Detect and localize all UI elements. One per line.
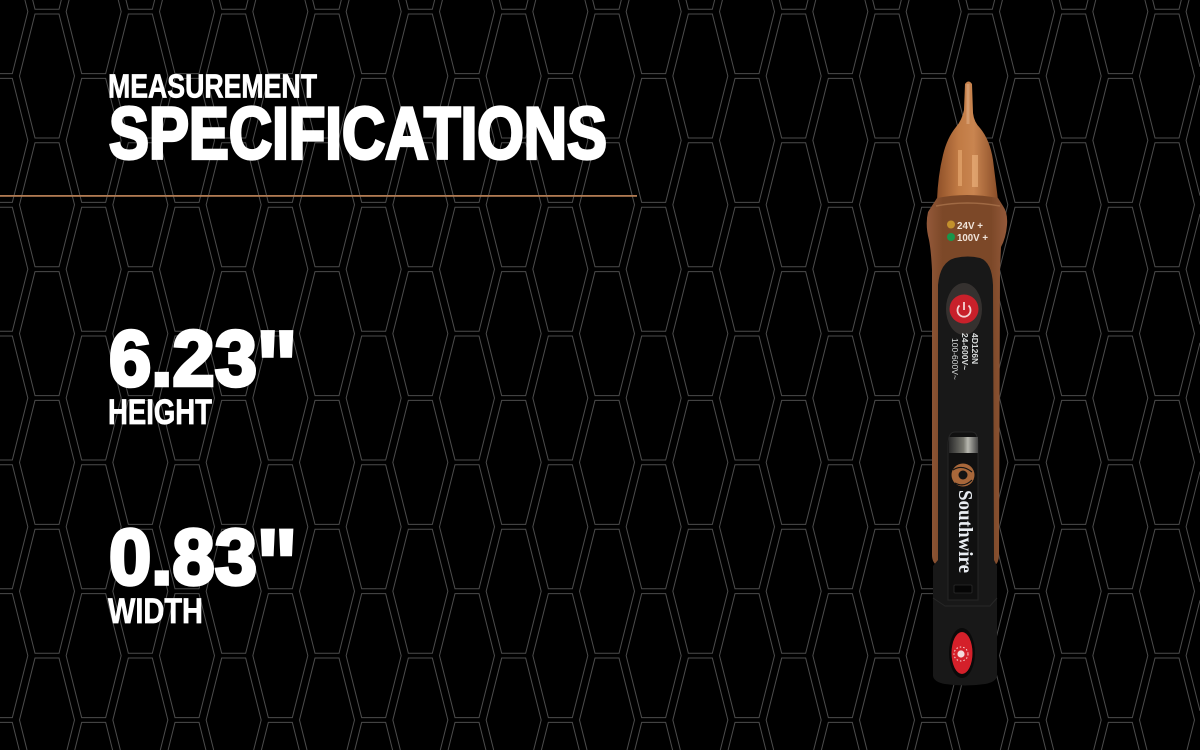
collar highlight bbox=[936, 203, 1000, 206]
black body bbox=[933, 256, 997, 686]
heading: measurement specifications bbox=[108, 68, 607, 174]
flashlight button bbox=[949, 628, 975, 678]
stat: height bbox=[108, 310, 298, 432]
model text bbox=[950, 333, 980, 380]
LED indicator labels: 100V + bbox=[957, 232, 988, 244]
stat: width: " bbox=[256, 508, 298, 620]
stat: height: HEIGHT bbox=[108, 393, 212, 432]
model text: 4D126N bbox=[970, 333, 980, 364]
power button recess bbox=[946, 283, 982, 335]
heading: measurement specifications: MEASUREMENT bbox=[108, 68, 317, 104]
product: voltage tester pen bbox=[927, 82, 1007, 686]
stat: height: 6.23 bbox=[109, 314, 257, 402]
stat: height: " bbox=[256, 310, 298, 422]
LED indicator labels bbox=[947, 220, 988, 244]
stat: width: WIDTH bbox=[108, 592, 203, 631]
stat: width: 0.83 bbox=[109, 512, 257, 601]
model text: 100-600V~ bbox=[950, 338, 960, 380]
LED indicator labels: 24V + bbox=[957, 220, 983, 232]
divider rule bbox=[0, 195, 637, 197]
model text: 24-600V~ bbox=[960, 333, 970, 370]
stat: width bbox=[108, 508, 298, 631]
lower seam bbox=[933, 598, 997, 606]
slider clip bbox=[948, 432, 978, 600]
brown body housing bbox=[927, 195, 1007, 566]
power button bbox=[950, 294, 978, 324]
probe tip and translucent cone bbox=[937, 82, 998, 200]
Southwire brand text: Southwire bbox=[954, 490, 976, 573]
small window bbox=[954, 585, 972, 593]
Southwire logo mark bbox=[952, 464, 974, 486]
heading: measurement specifications: SPECIFICATIONS bbox=[109, 94, 607, 174]
